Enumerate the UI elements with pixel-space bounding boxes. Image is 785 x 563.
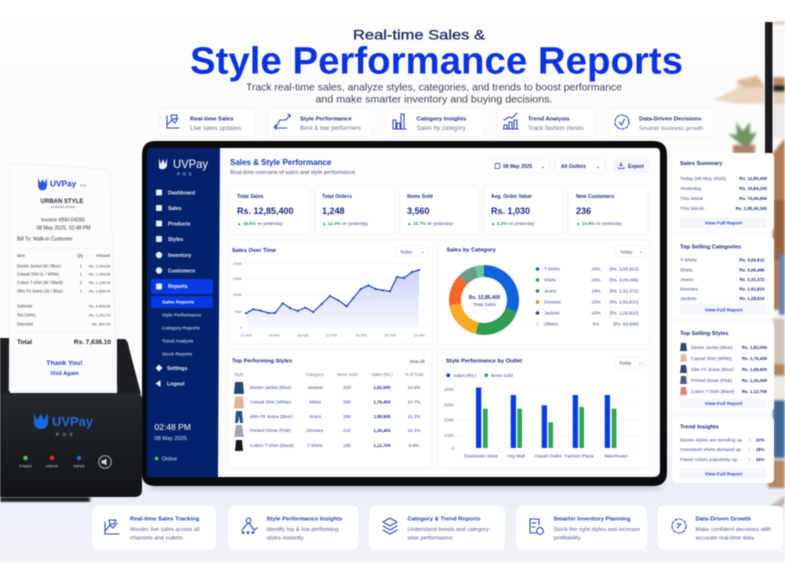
card: trend insights: View Full Report	[705, 472, 743, 478]
card: top selling categories: Jeans	[680, 277, 694, 283]
card: top selling styles: Denim Jacket (Blue)	[691, 345, 733, 350]
bar chart: City Mall	[507, 454, 525, 458]
donut legend: 10%	[591, 310, 601, 316]
styles table: T-Shirts	[307, 443, 324, 448]
receipt logo: POS	[80, 184, 86, 188]
right sidebar cards	[672, 153, 774, 483]
receipt line items: Tax (18%)	[17, 312, 36, 318]
panel: style performance by outlet: Style Performance by Outlet	[446, 358, 522, 364]
donut legend: Jeans	[544, 288, 557, 294]
KPI: total sales: ▲ 18.6% vs yesterday	[237, 221, 284, 226]
receipt total: Total	[17, 339, 32, 346]
card: trend insights: Pastel colors popularity up	[680, 457, 738, 463]
card: sales summary: View Full Report	[705, 220, 743, 226]
KPI: items sold	[400, 186, 479, 234]
card: top selling styles	[672, 323, 774, 411]
bottom feature cards	[92, 506, 783, 550]
sidebar	[147, 148, 220, 477]
chip: real-time sales: Real-time Sales	[190, 116, 234, 122]
receipt thank you: Visit Again	[50, 371, 79, 377]
receipt line items: Discount	[17, 322, 34, 326]
receipt line items: 2	[80, 280, 83, 285]
sidebar menu: Styles	[168, 237, 183, 243]
donut legend: (Rs. 3,08,496)	[609, 278, 639, 282]
dashboard header: ⌄	[596, 164, 600, 169]
donut legend: Shirts	[544, 278, 556, 282]
dashboard header: Export	[628, 164, 644, 170]
bar chart: 100K	[444, 433, 454, 438]
sidebar menu: Customers	[168, 268, 195, 274]
chip: data-driven decisions: Data-Driven Decisions	[639, 116, 702, 122]
panel: top performing styles	[228, 350, 432, 468]
chip: category insights	[386, 108, 485, 137]
styles table: % of Total	[405, 372, 423, 377]
line chart: 0	[240, 325, 243, 330]
printer status lights: ERROR	[46, 464, 59, 468]
card: sales summary: This Month	[680, 206, 704, 212]
card: top selling styles: Rs. 1,92,000	[742, 345, 768, 350]
dashboard header: Real-time overview of sales and style performance	[230, 170, 355, 176]
feature: real-time sales tracking: Real-time Sales Tracking	[130, 516, 200, 522]
subtitle: Track real-time sales, analyze styles, categories, and trends to boost performance	[246, 82, 622, 94]
chip: trend analysis: Track fashion trends	[528, 125, 584, 132]
receipt header text: Invoice #INV-04260	[41, 218, 85, 224]
receipt line items: - Rs. 500.00	[90, 322, 110, 326]
card: top selling styles: Rs. 1,12,700	[742, 389, 768, 394]
card: top selling categories: Shirts	[680, 268, 693, 274]
styles table: 13.7%	[407, 400, 421, 404]
KPI: total orders: 1,248	[322, 206, 345, 216]
receipt line items: 1	[80, 264, 83, 268]
receipt line items: Qty	[77, 253, 84, 258]
KPI: new customers: New Customers	[576, 194, 615, 200]
sidebar menu: Stock Reports	[162, 352, 193, 358]
panel: sales by category: Rs. 12,85,400	[469, 295, 500, 301]
feature: smarter inventory planning: Stock the right styles and increase	[554, 527, 640, 533]
sidebar clock	[154, 422, 191, 462]
bar chart: 300K	[444, 402, 454, 408]
card: top selling styles: Rs. 1,34,400	[742, 378, 768, 383]
panel: sales by category: Today	[620, 250, 633, 254]
chip: style performance: Best & low performers	[300, 125, 361, 132]
dashboard header: Sales & Style Performance	[230, 158, 332, 167]
receipt line items: Slim Fit Jeans (32 / Blue)	[17, 288, 63, 294]
donut legend: 26%	[591, 266, 601, 272]
feature: real-time sales tracking: channels and outlets.	[130, 536, 184, 542]
donut legend: T-Shirts	[544, 266, 561, 272]
subtitle: and make smarter inventory and buying decisions.	[316, 94, 552, 106]
bar chart: 400K	[444, 387, 454, 392]
feature: category and trend reports: Category & Trend Reports	[408, 516, 481, 522]
card: trend insights: Oversized shirts demand up	[680, 447, 741, 453]
receipt header text	[17, 199, 91, 242]
card: trend insights: Denim styles are trending up	[680, 438, 743, 444]
sidebar menu: Products	[168, 222, 191, 228]
title block	[190, 26, 683, 106]
donut legend	[536, 266, 639, 326]
card: top selling categories: Rs. 1,92,810	[739, 286, 765, 292]
KPI: average order value	[484, 186, 563, 234]
feature chips row	[160, 108, 714, 137]
printer logo	[34, 413, 94, 437]
dashboard header: ⌄	[541, 164, 545, 169]
line chart: 12 AM	[413, 332, 425, 338]
chip: style performance	[268, 108, 373, 137]
title: eyebrow: Real-time Sales &	[353, 26, 486, 42]
styles table: 1,92,000	[373, 385, 391, 390]
styles table: Style	[234, 372, 244, 377]
styles table: 1,58,600	[373, 414, 391, 419]
sidebar menu: Trend Analysis	[162, 338, 194, 344]
KPI: average order value: ▲ 9.3% vs yesterday	[491, 221, 535, 226]
chip: trend analysis	[497, 108, 595, 137]
card: top selling categories: Dresses	[680, 286, 698, 292]
receipt line items: Denim Jacket (M / Blue)	[17, 264, 61, 268]
receipt logo: UVPay	[50, 178, 77, 188]
receipt total: Rs. 7,636.10	[74, 339, 111, 346]
feature: category and trend reports: wise performance.	[406, 536, 454, 542]
KPI: average order value: Avg. Order Value	[491, 194, 532, 200]
styles table: Cotton T-Shirt (Black)	[250, 443, 294, 448]
panel: style performance by outlet: ⌄	[638, 360, 642, 365]
card: sales summary: Rs. 74,56,600	[739, 196, 768, 201]
KPI: new customers: ▲ 14.8% vs yesterday	[576, 221, 623, 226]
styles table: Sales (Rs.)	[371, 372, 393, 377]
card: sales summary: Sales Summary	[680, 161, 723, 167]
card: top selling styles: Printed Dress (Pink)	[691, 378, 733, 383]
styles table: 1,34,400	[373, 428, 391, 433]
KPI: items sold: 3,560	[407, 206, 430, 216]
donut legend: 15%	[591, 300, 601, 304]
tablet shadow	[150, 478, 660, 490]
sidebar logo: UVPay	[173, 157, 208, 171]
sidebar menu: Style Performance	[162, 312, 202, 318]
feature: style performance insights: Identify top & low performing	[266, 527, 339, 533]
sidebar menu: Dashboard	[168, 190, 195, 196]
card: top selling styles: Slim Fit Jeans (Blue)	[691, 367, 734, 372]
styles table: Shirts	[309, 400, 322, 404]
chip: trend analysis: Trend Analysis	[528, 116, 570, 122]
receipt thank you	[46, 360, 83, 377]
receipt header text: Bill To: Walk-in Customer	[17, 236, 73, 242]
donut legend: (Rs. 2,31,372)	[609, 288, 639, 294]
bar chart	[444, 387, 640, 458]
styles table: 1,12,700	[373, 443, 391, 448]
feature: category and trend reports: Understand trends and category-	[408, 527, 491, 533]
panel: style performance by outlet	[438, 350, 650, 468]
receipt line items: Subtotal	[17, 304, 32, 308]
sidebar logo	[159, 157, 208, 176]
styles table: Printed Dress (Pink)	[250, 428, 292, 433]
receipt line items: Casual Shirt (L / White)	[17, 272, 60, 276]
styles table: Dresses	[307, 428, 324, 433]
card: sales summary: Rs. 10,84,200	[739, 186, 768, 191]
receipt line items: Rs. 1,198.00	[89, 281, 110, 285]
sidebar menu: Sales	[168, 206, 182, 212]
printer logo: UVPay	[52, 414, 94, 429]
receipt paper	[9, 164, 117, 391]
feature: data-driven growth: Data-Driven Growth	[696, 516, 751, 522]
line chart: 04 AM	[268, 332, 280, 338]
dashboard header: All Outlets	[561, 164, 586, 170]
dashboard header	[230, 158, 649, 176]
card: trend insights: 22%	[756, 438, 765, 442]
card: top selling styles: Casual Shirt (White)	[691, 356, 733, 361]
card: trend insights	[672, 417, 774, 483]
bar chart: 200K	[444, 418, 454, 422]
line chart	[233, 261, 425, 338]
receipt thank you: Thank You!	[46, 360, 83, 367]
styles table: 14.9%	[407, 385, 421, 390]
bar chart: Fashion Plaza	[564, 454, 594, 458]
card: top selling categories: Rs. 2,31,372	[739, 277, 765, 282]
styles table: Denim Jacket (Blue)	[250, 385, 292, 390]
styles table: 12.3%	[407, 414, 421, 419]
sidebar menu: Category Reports	[162, 326, 200, 332]
chip: style performance: Style Performance	[300, 116, 352, 122]
sidebar logo: POS	[177, 172, 194, 176]
receipt logo	[38, 178, 86, 190]
styles table: Slim Fit Jeans (Blue)	[250, 414, 293, 419]
receipt total	[17, 339, 111, 346]
feature: style performance insights	[228, 506, 358, 550]
chip: category insights: Sales by category	[416, 125, 467, 132]
bar chart legend: Items Sold	[491, 373, 513, 378]
chip: data-driven decisions	[608, 108, 714, 137]
sidebar menu: Logout	[167, 382, 185, 388]
line chart: 50K	[235, 309, 242, 314]
donut legend: (Rs. 63,000)	[613, 322, 639, 326]
card: top selling categories: T-Shirts	[680, 258, 697, 264]
panel: sales by category: Sales by Category	[446, 248, 497, 254]
card: top selling styles: Rs. 1,76,400	[742, 356, 768, 361]
styles table: Jackets	[307, 385, 323, 390]
sidebar clock: Online	[162, 456, 177, 462]
chip: real-time sales: Live sales updates	[190, 125, 241, 132]
card: top selling categories: Jackets	[680, 296, 697, 302]
donut legend: (Rs. 1,28,810)	[609, 310, 639, 316]
panel: style performance by outlet: Today	[619, 360, 632, 366]
card: top selling styles: Top Selling Styles	[680, 331, 729, 337]
panel: sales by category: Total Sales	[473, 302, 496, 307]
chip: category insights: Category Insights	[416, 116, 467, 122]
bar chart: Downtown Store	[464, 454, 498, 458]
receipt line items: Rs. 1,299.00	[89, 272, 110, 276]
styles table: 280	[343, 400, 351, 404]
card: sales summary: Rs. 2,85,40,300	[736, 206, 768, 211]
card: top selling styles: Rs. 1,58,600	[742, 367, 768, 372]
donut legend: 5%	[593, 322, 599, 326]
donut legend: (Rs. 1,92,810)	[609, 300, 639, 304]
card: top selling categories: Rs. 3,06,496	[739, 268, 765, 272]
bar chart: Airport Outlet	[534, 454, 562, 458]
tablet dashboard	[142, 141, 667, 490]
panel: top performing styles: View All	[409, 359, 425, 364]
KPI: total orders: ▲ 12.4% vs yesterday	[322, 221, 369, 226]
line chart: 150K	[233, 276, 242, 281]
styles table: 320	[343, 385, 351, 390]
receipt line items	[17, 248, 111, 332]
card: top selling categories: Rs. 1,28,810	[739, 296, 765, 301]
styles table: 210	[343, 428, 351, 433]
line chart: 200K	[233, 261, 242, 266]
receipt line items: 1	[80, 288, 83, 294]
panel: sales over time: Sales Over Time	[232, 248, 276, 254]
feature: data-driven growth	[658, 506, 783, 550]
card: sales summary: This Week	[680, 196, 704, 202]
sidebar menu: Inventory	[168, 253, 191, 259]
receipt line items: 1	[80, 272, 83, 276]
sidebar menu: Sales Reports	[162, 300, 194, 306]
panel: sales by category	[438, 240, 650, 345]
receipt line items: Cotton T-Shirt (M / Black)	[17, 280, 64, 285]
sidebar menu: Settings	[167, 366, 188, 372]
receipt line items: Amount	[96, 253, 111, 258]
card: sales summary: Today (08 May 2025)	[680, 176, 726, 182]
line chart: 08 PM	[384, 332, 396, 338]
feature: category and trend reports	[369, 506, 505, 550]
receipt line items: Rs. 6,895.00	[89, 304, 110, 308]
printer status lights: POWER	[19, 464, 32, 468]
donut legend: 24%	[591, 278, 601, 282]
receipt header text: 08 May 2025, 02:48 PM	[36, 226, 91, 232]
sidebar menu: Reports	[168, 284, 188, 290]
styles table: Casual Shirt (White)	[250, 400, 292, 404]
card: sales summary: Yesterday	[680, 186, 702, 192]
card: trend insights: 18%	[756, 447, 765, 452]
styles table: Jeans	[309, 414, 322, 419]
KPI: average order value: Rs. 1,030	[491, 206, 530, 216]
title: main heading: Style Performance Reports	[190, 40, 683, 82]
bar chart legend	[446, 373, 513, 378]
bar chart legend: Sales (Rs.)	[454, 373, 477, 378]
feature: real-time sales tracking	[92, 506, 216, 550]
card: trend insights: ↑	[748, 457, 751, 463]
printer status lights: PAPER	[74, 464, 85, 468]
donut legend: Jackets	[544, 310, 560, 316]
line chart: 12 PM	[325, 332, 337, 338]
panel: sales by category: ⌄	[639, 249, 643, 254]
styles table: Items Sold	[337, 372, 358, 377]
card: trend insights: 16%	[756, 457, 765, 462]
card: top selling categories: Rs. 3,59,912	[739, 258, 765, 262]
styles table: Category	[306, 372, 325, 377]
styles table: 195	[343, 443, 351, 448]
tablet screen	[147, 148, 660, 477]
KPI: items sold: Items Sold	[407, 194, 433, 200]
KPI cards	[229, 186, 648, 234]
donut legend: (Rs. 3,55,912)	[609, 266, 639, 272]
printer status lights	[19, 456, 111, 468]
receipt header text: FASHION STORE	[51, 205, 75, 209]
card: top selling styles: Cotton T-Shirt (Black)	[691, 389, 735, 394]
panel: top performing styles: Top Performing Styles	[232, 358, 292, 364]
receipt line items: Rs. 1,899.00	[89, 290, 110, 294]
bar chart: 0	[452, 446, 455, 451]
card: sales summary	[672, 153, 774, 231]
line chart: 12 AM	[240, 332, 252, 338]
card: top selling categories	[672, 237, 774, 318]
receipt line items: Rs. 2,499.00	[89, 264, 110, 268]
card: trend insights: ↑	[748, 438, 751, 444]
styles table: 10.4%	[407, 428, 421, 433]
tablet bezel	[142, 141, 667, 486]
sidebar clock: 02:48 PM	[154, 422, 191, 432]
feature: data-driven growth: Make confident decisions with	[696, 527, 771, 533]
card: trend insights: ↑	[748, 447, 751, 453]
feature: style performance insights: Style Performance Insights	[266, 516, 343, 522]
donut legend: Others	[544, 322, 558, 326]
KPI: new customers	[568, 186, 648, 234]
dashboard header: 08 May 2025	[503, 164, 532, 170]
feature: smarter inventory planning: profitability.	[554, 536, 582, 542]
KPI: items sold: ▲ 15.7% vs yesterday	[407, 221, 454, 226]
receipt line items: Item	[17, 253, 26, 258]
feature: smarter inventory planning	[516, 506, 647, 550]
card: trend insights: Trend Insights	[680, 424, 719, 430]
panel: sales over time: Today	[400, 250, 413, 254]
panel: sales over time: ⌄	[421, 249, 425, 254]
donut chart	[455, 271, 513, 329]
feature: real-time sales tracking: Monitor live sales across all	[130, 527, 200, 533]
donut legend: Dresses	[544, 300, 562, 304]
line chart: 100K	[233, 292, 242, 297]
feature: smarter inventory planning: Smarter Inventory Planning	[554, 516, 631, 522]
KPI: total sales: Rs. 12,85,400	[237, 206, 294, 216]
styles table: 8.8%	[409, 443, 419, 448]
receipt header text: URBAN STYLE	[41, 199, 83, 205]
KPI: total sales	[229, 186, 310, 234]
line chart: 08 AM	[297, 332, 309, 338]
styles table	[234, 372, 423, 451]
feature: style performance insights: styles instantly.	[266, 536, 305, 542]
feature: data-driven growth: accurate real-time data.	[696, 536, 756, 542]
styles table: 260	[343, 414, 351, 419]
styles table: 1,76,400	[373, 400, 391, 404]
card: top selling categories: Top Selling Categories	[680, 244, 741, 250]
printer back housing	[0, 338, 141, 394]
KPI: total sales: Total Sales	[237, 194, 264, 200]
printer body	[0, 393, 142, 497]
printer logo: POS	[56, 432, 76, 437]
KPI: total orders: Total Orders	[322, 194, 352, 200]
line chart: 04 PM	[355, 332, 367, 338]
chip: real-time sales	[160, 108, 256, 137]
subtitle	[246, 82, 622, 106]
receipt line items: Rs. 1,241.10	[89, 314, 110, 318]
KPI: total orders	[315, 186, 395, 234]
card: top selling styles: View Full Report	[705, 401, 743, 407]
card: top selling categories: View Full Report	[705, 308, 743, 314]
sidebar clock: 08 May 2025	[154, 436, 187, 442]
sidebar menu	[151, 190, 213, 388]
receipt printer	[0, 164, 142, 502]
KPI: new customers: 236	[576, 206, 591, 216]
panel: sales over time	[229, 240, 433, 344]
bar chart: Warehouse	[604, 454, 628, 458]
chip: data-driven decisions: Smarter business growth	[639, 126, 703, 132]
donut legend: 18%	[591, 288, 601, 294]
background photo: clothing shop shelves	[713, 22, 785, 520]
card: sales summary: Rs. 12,85,400	[739, 176, 768, 181]
